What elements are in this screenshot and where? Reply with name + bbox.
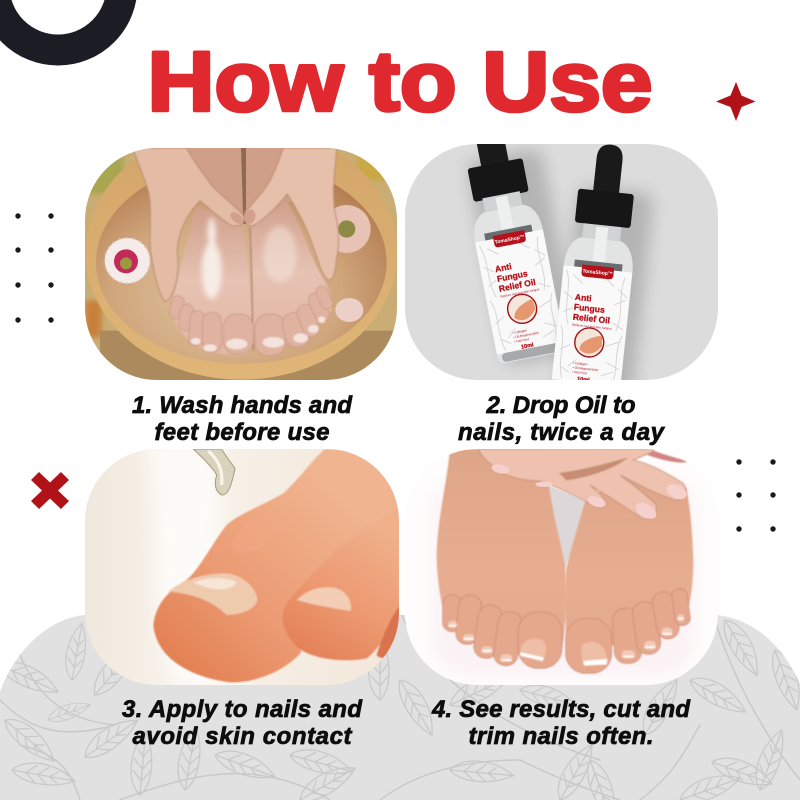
- oil dropper and drop: [193, 449, 235, 495]
- legs: [187, 147, 293, 214]
- photo 1: feet soaking in wooden bowl: [85, 148, 397, 380]
- caption: step 1: feet before use: [154, 419, 330, 446]
- background panel: grey leaf arch: [0, 600, 800, 800]
- large toe: [153, 449, 400, 682]
- icon: red four-point star: [716, 82, 756, 121]
- caption: step 2: nails, twice a day: [458, 419, 666, 446]
- title: How to Use: [148, 34, 652, 128]
- floating petal: [335, 298, 363, 322]
- caption: step 3: 3. Apply to nails and: [122, 696, 363, 723]
- finger nails: [491, 463, 689, 522]
- foot highlights: [202, 217, 297, 299]
- bottle left: [463, 144, 567, 369]
- leaf pattern: [0, 610, 800, 800]
- caption: step 3: [122, 696, 363, 750]
- bowl: [85, 125, 397, 380]
- right foot: [565, 465, 693, 673]
- dot grid: left: [15, 213, 54, 323]
- photo 3: oil drop applied to toe nail: [80, 445, 405, 690]
- photo 2: two bottles of anti fungus relief oil: [405, 144, 718, 380]
- icon: red cross: [31, 472, 69, 509]
- flower: right: [334, 205, 371, 253]
- photo 4: feet with trimmed nails: [400, 445, 725, 690]
- caption: step 2: [458, 392, 666, 446]
- caption: step 3: avoid skin contact: [132, 723, 352, 750]
- bottle right: [552, 144, 658, 380]
- caption: step 4: [431, 696, 691, 750]
- feet: [169, 201, 335, 356]
- flower: left: [105, 238, 150, 283]
- nails: [230, 212, 243, 224]
- dot grid: right: [736, 459, 776, 532]
- caption: step 1: [132, 392, 353, 446]
- caption: step 4: trim nails often.: [468, 723, 654, 750]
- caption: step 1: 1. Wash hands and: [132, 392, 353, 419]
- decorative ring: top-left: [0, 0, 122, 50]
- caption: step 2: 2. Drop Oil to: [486, 392, 636, 419]
- left foot: [437, 449, 566, 668]
- towel gap between feet: [549, 486, 586, 568]
- hands on top: [478, 449, 687, 519]
- caption: step 4: 4. See results, cut and: [431, 696, 691, 723]
- hands: [133, 148, 338, 301]
- gap between feet: [241, 147, 246, 224]
